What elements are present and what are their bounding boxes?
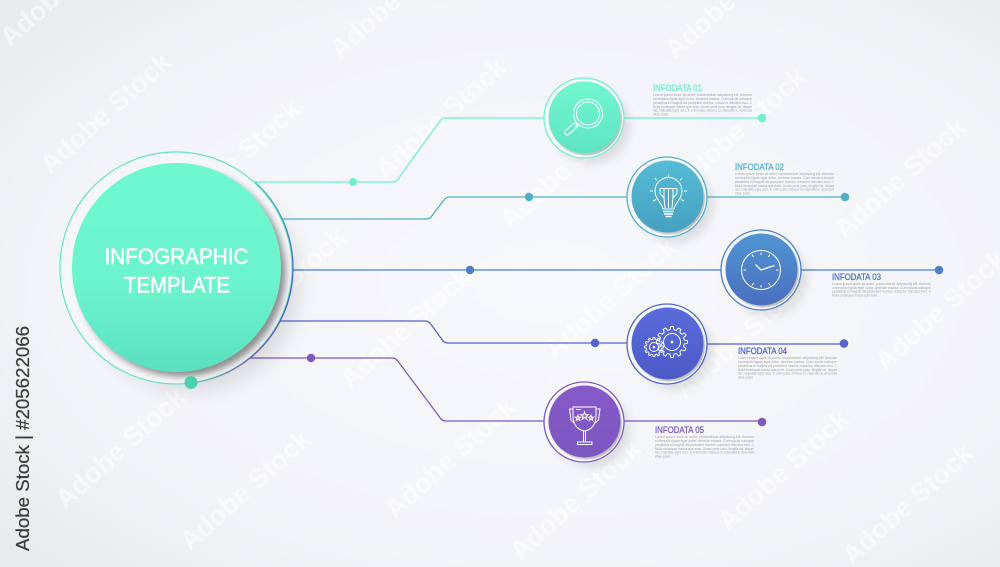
watermarks: Adobe Stock xyxy=(712,403,855,536)
text block: infodata 03: Nulla consequat massa quis enim. xyxy=(832,293,878,297)
connector: line 1 xyxy=(255,114,766,186)
watermarks: Adobe Stock xyxy=(539,231,682,364)
watermarks: Adobe Stock xyxy=(174,423,317,556)
main title: INFOGRAPHIC xyxy=(104,244,249,269)
icon: clock xyxy=(742,250,780,290)
text block: infodata 02: commodo ligula eget dolor. Aenean massa. Cum sociis natoque xyxy=(735,176,834,180)
text block: infodata 01: commodo ligula eget dolor. Aenean massa. Cum sociis natoque xyxy=(653,97,752,101)
main circle: TEMPLATE xyxy=(124,272,230,298)
text block: infodata 05 xyxy=(655,425,754,458)
watermarks: Adobe Stock xyxy=(379,391,522,524)
text block: infodata 02 xyxy=(735,162,834,196)
watermarks: Adobe Stock xyxy=(669,61,812,194)
text block: infodata 05: penatibus et magnis dis parturient montes, nascetur ridiculus mus. C xyxy=(655,443,754,447)
watermarks: Adobe Stock xyxy=(334,261,477,394)
text block: infodata 03: penatibus et magnis dis parturient montes, nascetur ridiculus mus. C xyxy=(832,290,931,294)
watermarks: Adobe Stock xyxy=(494,101,637,234)
connector: line 2 xyxy=(282,193,849,219)
text block: infodata 04: commodo ligula eget dolor. Aenean massa. Cum sociis natoque xyxy=(738,360,837,364)
watermarks: Adobe Stock xyxy=(34,46,177,179)
text block: infodata 04: vitae, justo. xyxy=(738,376,754,380)
text block: infodata 03 xyxy=(832,272,931,297)
text block: infodata 03: INFODATA 03 xyxy=(832,272,881,282)
watermarks: Adobe Stock xyxy=(49,381,192,514)
watermarks: Adobe Stock xyxy=(164,93,307,226)
text block: infodata 04: penatibus et magnis dis parturient montes, nascetur ridiculus mus. C xyxy=(738,364,837,368)
connector: line 5 xyxy=(250,354,766,426)
connector: line 4 xyxy=(279,321,848,348)
text block: infodata 04: Lorem ipsum dolor sit amet, consectetuer adipiscing elit. Aenean xyxy=(738,356,837,360)
watermarks: Adobe Stock xyxy=(829,111,972,244)
text block: infodata 05: INFODATA 05 xyxy=(655,425,704,435)
icon: trophy xyxy=(570,407,600,444)
watermarks: Adobe Stock xyxy=(369,51,512,184)
icon: light bulb xyxy=(650,174,687,216)
text block: infodata 04 xyxy=(738,346,837,380)
text block: infodata 01: INFODATA 01 xyxy=(653,83,702,93)
icon: magnifier xyxy=(564,99,602,136)
node 3: clock xyxy=(721,230,807,316)
text block: infodata 01: Lorem ipsum dolor sit amet, consectetuer adipiscing elit. Aenean xyxy=(653,93,752,97)
text block: infodata 02: penatibus et magnis dis parturient montes, nascetur ridiculus mus. C xyxy=(735,180,834,184)
watermarks: Adobe Stock xyxy=(209,221,352,354)
text block: infodata 03: Lorem ipsum dolor sit amet, consectetuer adipiscing elit. Aenean xyxy=(832,282,931,286)
text block: infodata 03: commodo ligula eget dolor. Aenean massa. Cum sociis natoque xyxy=(832,286,931,290)
text block: infodata 02: Nulla consequat massa quis enim. Donec pede justo, fringilla vel, aliquet xyxy=(735,184,834,188)
connector: line 3 xyxy=(292,266,943,274)
text block: infodata 01 xyxy=(653,83,752,116)
text block: infodata 04: Nulla consequat massa quis enim. Donec pede justo, fringilla vel, aliquet xyxy=(738,368,837,372)
main circle xyxy=(60,152,300,392)
text block: infodata 05: Nulla consequat massa quis enim. Donec pede justo, fringilla vel, aliquet xyxy=(655,447,754,451)
icon: gears xyxy=(644,327,687,357)
text block: infodata 01: vitae, justo. xyxy=(653,112,669,116)
text block: infodata 05: vitae, justo. xyxy=(655,454,671,458)
watermarks: Adobe Stock xyxy=(504,433,647,566)
text block: infodata 02: vitae, justo. xyxy=(735,192,751,196)
text block: infodata 01: penatibus et magnis dis parturient montes, nascetur ridiculus mus. C xyxy=(653,101,752,105)
text block: infodata 01: Nulla consequat massa quis enim. Donec pede justo, fringilla vel, aliquet xyxy=(653,105,752,109)
node 5: trophy xyxy=(544,382,630,468)
text block: infodata 05: commodo ligula eget dolor. Aenean massa. Cum sociis natoque xyxy=(655,439,754,443)
stock id label: Adobe Stock | #205622066 xyxy=(13,326,33,551)
text block: infodata 05: nec, vulputate eget, arcu. In enim justo, rhoncus ut, imperdiet a, venenatis xyxy=(655,451,754,455)
text block: infodata 05: Lorem ipsum dolor sit amet, consectetuer adipiscing elit. Aenean xyxy=(655,435,754,439)
node 4: gears xyxy=(627,304,713,390)
watermarks: Adobe Stock xyxy=(669,271,812,404)
text block: infodata 04: INFODATA 04 xyxy=(738,346,787,356)
text block: infodata 02: nec, vulputate eget, arcu. In enim justo, rhoncus ut, imperdiet a, venenatis xyxy=(735,188,834,192)
watermarks: Adobe Stock xyxy=(836,437,979,567)
node 2: bulb xyxy=(627,157,713,243)
text block: infodata 02: Lorem ipsum dolor sit amet, consectetuer adipiscing elit. Aenean xyxy=(735,172,834,176)
text block: infodata 04: nec, vulputate eget, arcu. In enim justo, rhoncus ut, imperdiet a, venenatis xyxy=(738,372,837,376)
node 1: magnifier xyxy=(544,78,630,164)
text block: infodata 02: INFODATA 02 xyxy=(735,162,784,172)
text block: infodata 01: nec, vulputate eget, arcu. In enim justo, rhoncus ut, imperdiet a, venenatis xyxy=(653,109,752,113)
